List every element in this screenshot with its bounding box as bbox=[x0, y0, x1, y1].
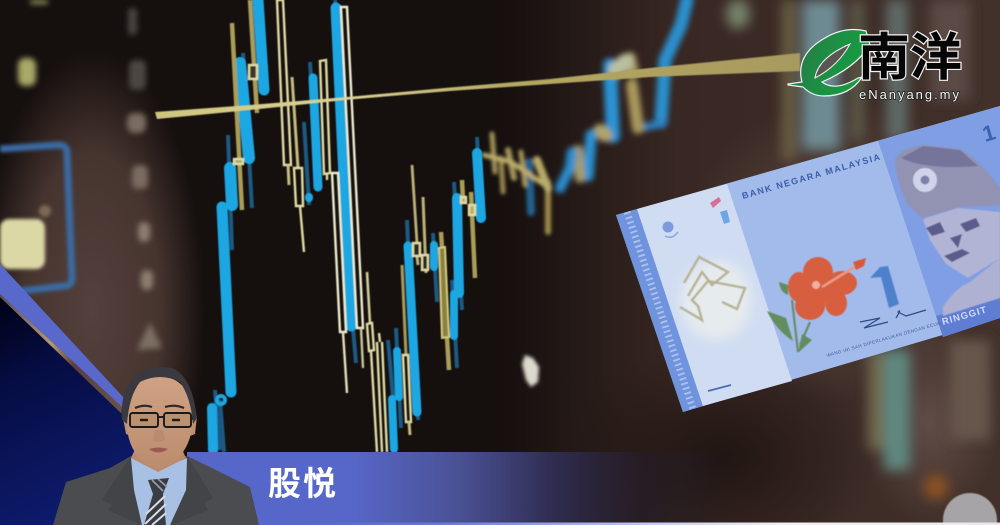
presenter portrait bbox=[53, 367, 259, 525]
watermark glow bbox=[680, 260, 752, 340]
right lapel bbox=[172, 456, 213, 525]
hair bbox=[122, 367, 197, 424]
stamen bbox=[822, 266, 856, 287]
cream price blob bbox=[0, 205, 51, 269]
eyebrows bbox=[135, 406, 184, 408]
ringgit text: RINGGIT bbox=[941, 304, 989, 328]
logo: eNanyang bbox=[788, 16, 962, 102]
eyes bbox=[140, 419, 180, 421]
banknote: RM1 bbox=[616, 106, 1000, 412]
column of axis labels bbox=[127, 8, 162, 350]
site name: eNanyang.my bbox=[859, 87, 960, 102]
glasses bbox=[130, 413, 191, 427]
top-right numeral: 1 bbox=[979, 119, 998, 147]
petals bbox=[788, 257, 857, 320]
hibiscus flower bbox=[767, 257, 866, 353]
left security strip bbox=[616, 209, 703, 412]
olive yellow wicks bbox=[232, 0, 475, 370]
left lapel bbox=[102, 456, 144, 525]
flower centre bbox=[812, 281, 820, 289]
face bbox=[127, 375, 192, 468]
note body bbox=[616, 106, 1000, 412]
diagonal accent stripe bbox=[0, 264, 124, 413]
pale hollow candles bbox=[277, 0, 426, 452]
facial shading bbox=[926, 218, 980, 262]
bank name text: BANK NEGARA MALAYSIA bbox=[741, 152, 881, 201]
navy corner panel bbox=[0, 297, 190, 525]
striped tie bbox=[144, 478, 169, 525]
signature bbox=[860, 310, 926, 328]
semi blurred candle cluster bbox=[484, 134, 548, 232]
small print: WANG INI SAH DIPERLAKUKAN DENGAN ECUK bbox=[826, 320, 942, 358]
candlestick chart bbox=[212, 0, 481, 452]
white window panel bbox=[637, 184, 792, 406]
blue outlined box bbox=[0, 145, 72, 291]
strip texture bbox=[627, 212, 693, 409]
mouth bbox=[149, 448, 168, 452]
face bbox=[923, 208, 1000, 278]
emblem star bbox=[913, 168, 937, 192]
blurred right side streaks bbox=[782, 0, 990, 470]
nose bbox=[153, 430, 165, 442]
collar bbox=[943, 258, 1000, 316]
right dark-blue panel bbox=[878, 106, 1000, 337]
watermark outline shapes bbox=[680, 257, 745, 320]
blurred rising candlesticks on the right bbox=[560, 0, 687, 188]
bottom-right dark panel for RINGGIT bbox=[936, 298, 1000, 337]
blurred side markers on the left bbox=[0, 0, 162, 350]
dark blue wicks bbox=[215, 0, 478, 452]
white disc bottom right bbox=[943, 493, 997, 525]
banner name text: 股悦 bbox=[268, 465, 338, 502]
name banner bbox=[187, 452, 727, 525]
olive filled candle bbox=[439, 247, 449, 338]
chinese wordmark: 南洋 bbox=[858, 16, 962, 90]
leaves bbox=[767, 282, 812, 353]
olive blobs bbox=[18, 0, 48, 86]
orange blur light bbox=[924, 475, 948, 499]
neck bbox=[131, 445, 186, 472]
ears bbox=[123, 416, 197, 436]
small box markers bbox=[234, 65, 475, 270]
mouse cursor blob bbox=[522, 355, 539, 387]
blurred top-right blob bbox=[726, 0, 750, 29]
denomination 1 bbox=[870, 266, 899, 308]
stems bbox=[792, 300, 810, 352]
security thread marks bbox=[662, 197, 731, 391]
green e mark bbox=[788, 30, 870, 96]
suit jacket bbox=[53, 456, 259, 525]
blue bodies bbox=[212, 0, 481, 450]
songkok headdress bbox=[895, 145, 1000, 218]
horizontal yellow trend line bbox=[155, 53, 800, 119]
shirt bbox=[131, 458, 187, 525]
portrait of Tunku Abdul Rahman bbox=[895, 145, 1000, 316]
bottom light strip bbox=[300, 522, 1000, 525]
